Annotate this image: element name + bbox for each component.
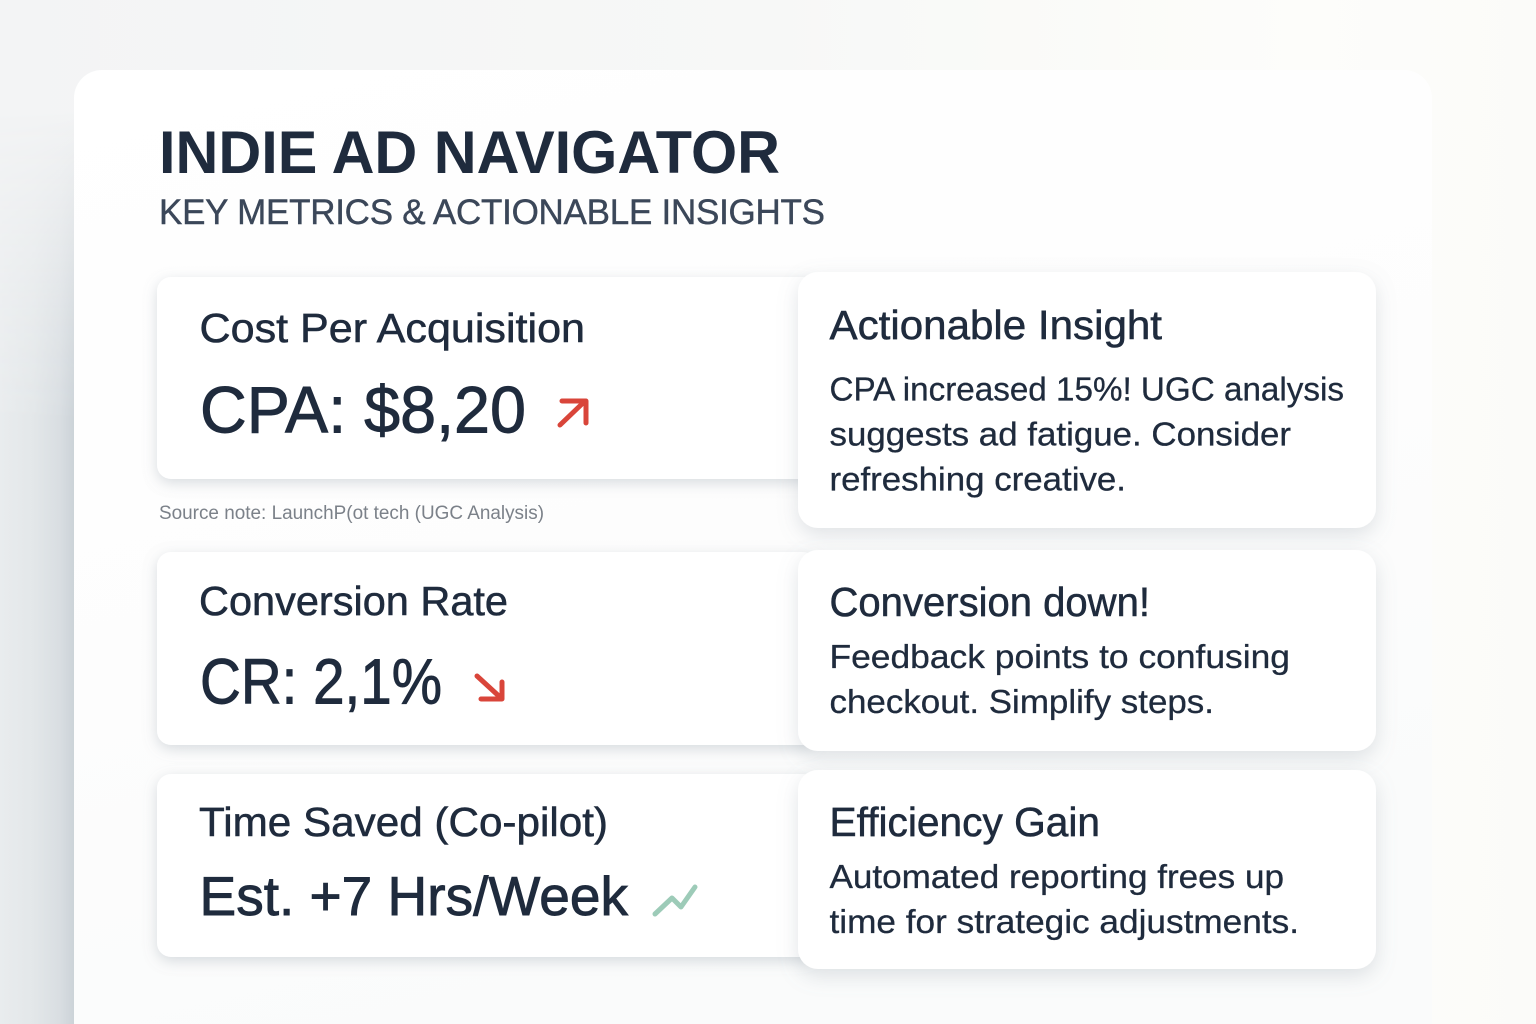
icon: green trend line [655,887,695,914]
insight body [830,858,1299,940]
main panel side shadow [0,172,74,1024]
insight body: checkout. Simplify steps. [830,683,1214,720]
panel: conversion rate [157,552,817,745]
metric label: Conversion Rate [199,578,508,624]
insight body: Automated reporting frees up [830,858,1284,895]
insight body: suggests ad fatigue. Consider [830,416,1291,452]
insight heading: Conversion down! [830,579,1150,625]
metric value: Est. +7 Hrs/Week [200,865,628,927]
subtitle: KEY METRICS & ACTIONABLE INSIGHTS [159,193,825,232]
panel: conversion down [798,550,1376,751]
panel: actionable insight [798,272,1376,528]
insight body [830,638,1290,720]
panel: efficiency gain [798,770,1376,969]
insight heading: Efficiency Gain [830,799,1100,845]
panel: cost per acquisition [157,277,817,479]
icon: red down arrow [477,676,502,699]
metric value: CPA: $8,20 [200,372,526,446]
source note: Source note: LaunchP(ot tech (UGC Analysis) [159,503,544,524]
metric label: Time Saved (Co-pilot) [199,799,608,845]
insight body: time for strategic adjustments. [830,903,1299,940]
insight body: refreshing creative. [830,460,1126,498]
insight body: CPA increased 15%! UGC analysis [830,370,1344,408]
icon: red up arrow [560,401,586,425]
metric label: Cost Per Acquisition [200,305,585,351]
title: INDIE AD NAVIGATOR [159,119,780,186]
panel: time saved [157,774,817,957]
insight heading: Actionable Insight [830,302,1163,348]
insight body: Feedback points to confusing [830,638,1290,675]
insight body [830,370,1344,498]
metric value: CR: 2,1% [200,646,442,718]
